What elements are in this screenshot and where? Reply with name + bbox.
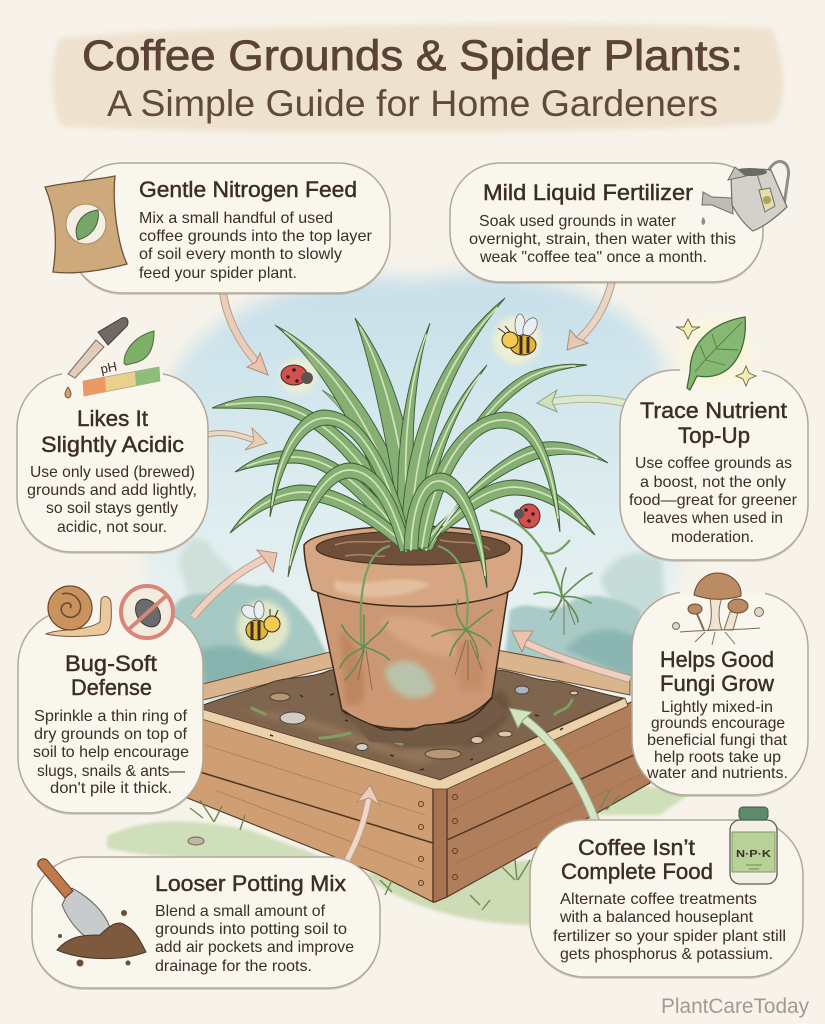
heading: Coffee Isn’t: [578, 835, 695, 860]
title brush band: [52, 24, 783, 133]
heading: Mild Liquid Fertilizer: [483, 180, 693, 205]
heading: [640, 398, 787, 448]
body text: Use only used (brewed): [30, 464, 195, 481]
bed back rim: [195, 650, 630, 702]
body text: slugs, snails & ants—: [37, 763, 185, 780]
body text: so soil stays gently: [46, 500, 178, 517]
body text: coffee grounds into the top layer: [139, 228, 373, 245]
body text: with a balanced houseplant: [559, 909, 754, 926]
body text: grounds into potting soil to: [155, 921, 347, 938]
heading: Gentle Nitrogen Feed: [139, 177, 357, 202]
body text: [27, 464, 197, 536]
body text: [629, 455, 798, 546]
body text: Mix a small handful of used: [139, 210, 333, 227]
icon: crossed-out bug: [121, 586, 173, 638]
arrow: bug-soft defense: [193, 550, 277, 617]
body text: water and nutrients.: [646, 765, 788, 782]
panel: helps good fungi grow: [632, 573, 808, 797]
heading: [660, 647, 774, 696]
heading: Helps Good: [660, 647, 774, 672]
icon: coffee sack: [45, 176, 127, 273]
body text: Use coffee grounds as: [635, 455, 792, 472]
title: [52, 24, 783, 133]
panel: gentle nitrogen feed: [45, 163, 390, 295]
icon: snail: [46, 586, 111, 636]
outer leaves: [212, 298, 608, 552]
panel: trace nutrient top-up: [620, 317, 808, 562]
body text: [469, 213, 736, 266]
body text: soil to help encourage: [33, 744, 189, 761]
panel: likes it slightly acidic: [17, 318, 208, 554]
body text: grounds and add lightly,: [27, 482, 197, 499]
icon: watering can: [702, 162, 789, 231]
panel: looser potting mix: [32, 857, 380, 990]
body text: Blend a small amount of: [155, 903, 326, 920]
icon: pH dropper and strip: pH: [99, 359, 118, 377]
arrow: potting mix: [345, 785, 380, 864]
body text: drainage for the roots.: [155, 958, 312, 975]
heading: Complete Food: [561, 859, 713, 884]
bed left face: [180, 716, 433, 902]
body text: beneficial fungi that: [647, 732, 788, 749]
body text: overnight, strain, then water with this: [469, 231, 736, 248]
arrow: trace nutrient: [537, 390, 625, 412]
ladybug top left: [280, 358, 316, 394]
body text: dry grounds on top of: [34, 726, 188, 743]
body text: acidic, not sour.: [57, 519, 167, 536]
bed corner post: [433, 787, 447, 902]
body text: a boost, not the only: [640, 474, 786, 491]
body text: Lightly mixed-in: [661, 699, 773, 716]
arrow: nitrogen feed: [223, 293, 268, 375]
ladybug on runner: [514, 504, 540, 528]
body text: moderation.: [671, 529, 754, 546]
icon: trowel and soil: [38, 859, 146, 966]
body text: gets phosphorus & potassium.: [560, 946, 773, 963]
body text: food—great for greener: [629, 492, 798, 509]
soil pebbles: [270, 686, 578, 759]
heading: Looser Potting Mix: [155, 871, 346, 896]
panel: coffee isn't complete food: [530, 807, 803, 979]
heading: [561, 835, 713, 884]
body text: add air pockets and improve: [155, 939, 354, 956]
body text: Soak used grounds in water: [479, 213, 677, 230]
body text: help roots take up: [654, 749, 781, 766]
icon: pH dropper and strip: [65, 318, 160, 398]
heading: Top-Up: [678, 423, 750, 448]
title line one: Coffee Grounds & Spider Plants:: [82, 32, 743, 80]
ground wash: [107, 821, 385, 880]
heading: Likes It: [77, 406, 148, 431]
body text: weak "coffee tea" once a month.: [479, 249, 707, 266]
title line two: A Simple Guide for Home Gardeners: [107, 83, 718, 124]
raised wooden garden bed: [180, 650, 650, 910]
hanging runners and baby plants: [340, 510, 592, 690]
icon: NPK bottle: [730, 807, 777, 884]
arrow: slightly acidic: [206, 428, 267, 450]
bee top right: [493, 314, 541, 364]
watermark: PlantCareToday: [661, 995, 809, 1018]
body text: of soil every month to slowly: [139, 246, 342, 263]
body text: feed your spider plant.: [139, 265, 297, 282]
body text: grounds encourage: [651, 715, 785, 732]
body text: [646, 699, 788, 782]
icon: mushrooms: [672, 573, 764, 645]
heading: Fungi Grow: [660, 671, 774, 696]
body text: [139, 210, 373, 282]
bed soil: [195, 670, 623, 780]
body text: leaves when used in: [643, 510, 783, 527]
body text: don't pile it thick.: [50, 780, 172, 797]
heading: Bug-Soft: [65, 651, 157, 676]
icon: NPK bottle: N·P·K: [736, 849, 772, 860]
body text: Alternate coffee treatments: [560, 891, 757, 908]
bed right face: [447, 698, 650, 897]
terracotta pot: [304, 526, 522, 745]
body text: [553, 891, 786, 963]
heading: Slightly Acidic: [41, 432, 184, 457]
pot soil: [316, 531, 510, 565]
body text: Sprinkle a thin ring of: [34, 708, 188, 725]
heading: Defense: [71, 675, 152, 700]
front drooping leaves: [270, 410, 560, 588]
spider plant: [212, 298, 608, 690]
background foliage: [107, 538, 695, 925]
icon: sparkling leaf: [676, 317, 756, 390]
soil heaped at pot base: [342, 698, 510, 745]
panel: mild liquid fertilizer: [450, 162, 789, 284]
bee lower left: [237, 601, 289, 653]
arrow: liquid fertilizer: [567, 281, 612, 350]
arrow: good fungi: [512, 631, 630, 679]
grass tufts: [190, 790, 620, 910]
heading: Trace Nutrient: [640, 398, 787, 423]
body text: fertilizer so your spider plant still: [553, 928, 786, 945]
heading: [41, 406, 184, 457]
heading: [65, 651, 157, 700]
watercolor sky background: [143, 274, 689, 720]
body text: [33, 708, 189, 797]
arrow: complete food: [509, 708, 597, 825]
body text: [155, 903, 354, 975]
panel: bug-soft defense: [18, 586, 203, 815]
